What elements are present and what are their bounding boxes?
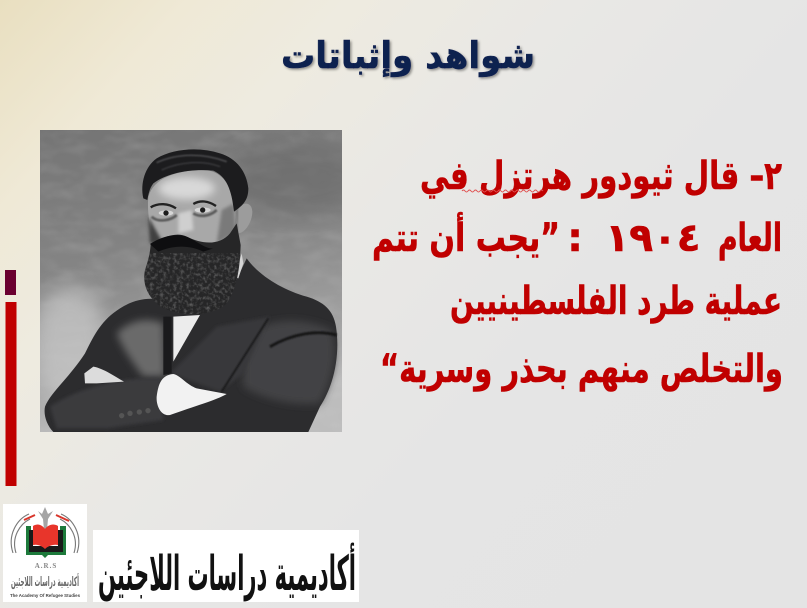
quote line 2: :: [567, 216, 583, 261]
hair: [142, 149, 248, 212]
beard: [144, 224, 241, 300]
figure: [38, 507, 53, 530]
spell-check squiggle: [462, 190, 543, 192]
portrait photograph: [40, 130, 342, 432]
academy calligraphy wordmark: [93, 530, 359, 602]
English caption: The Academy Of Refugee Studies: [10, 593, 81, 598]
book red pages: [33, 525, 58, 549]
emblem arcs: [11, 514, 79, 553]
jacket: [45, 258, 337, 432]
text: أكاديمية دراسات اللاجئين: [11, 573, 79, 590]
quote line 2: ”يجب أن تتم: [372, 212, 560, 261]
quote line 2: ١٩٠٤: [605, 216, 701, 261]
red accents: [24, 515, 69, 521]
ARS label: A.R.S: [35, 562, 57, 570]
quote line 2: [372, 212, 782, 261]
book green: [26, 526, 66, 558]
face: [148, 170, 236, 247]
book black: [29, 530, 63, 552]
eyes and brows: [151, 204, 176, 208]
academy logo emblem: [3, 504, 87, 602]
decorative maroon block: [5, 270, 16, 295]
text: أكاديمية دراسات اللاجئين: [98, 542, 356, 602]
ear: [238, 204, 252, 233]
collar: [237, 254, 244, 278]
body quote text: [372, 154, 783, 392]
hand and cuff: [84, 367, 124, 383]
decorative red vertical bar: [6, 302, 16, 486]
shirt: [173, 315, 200, 362]
title: شواهد وإثباتات: [281, 34, 535, 77]
